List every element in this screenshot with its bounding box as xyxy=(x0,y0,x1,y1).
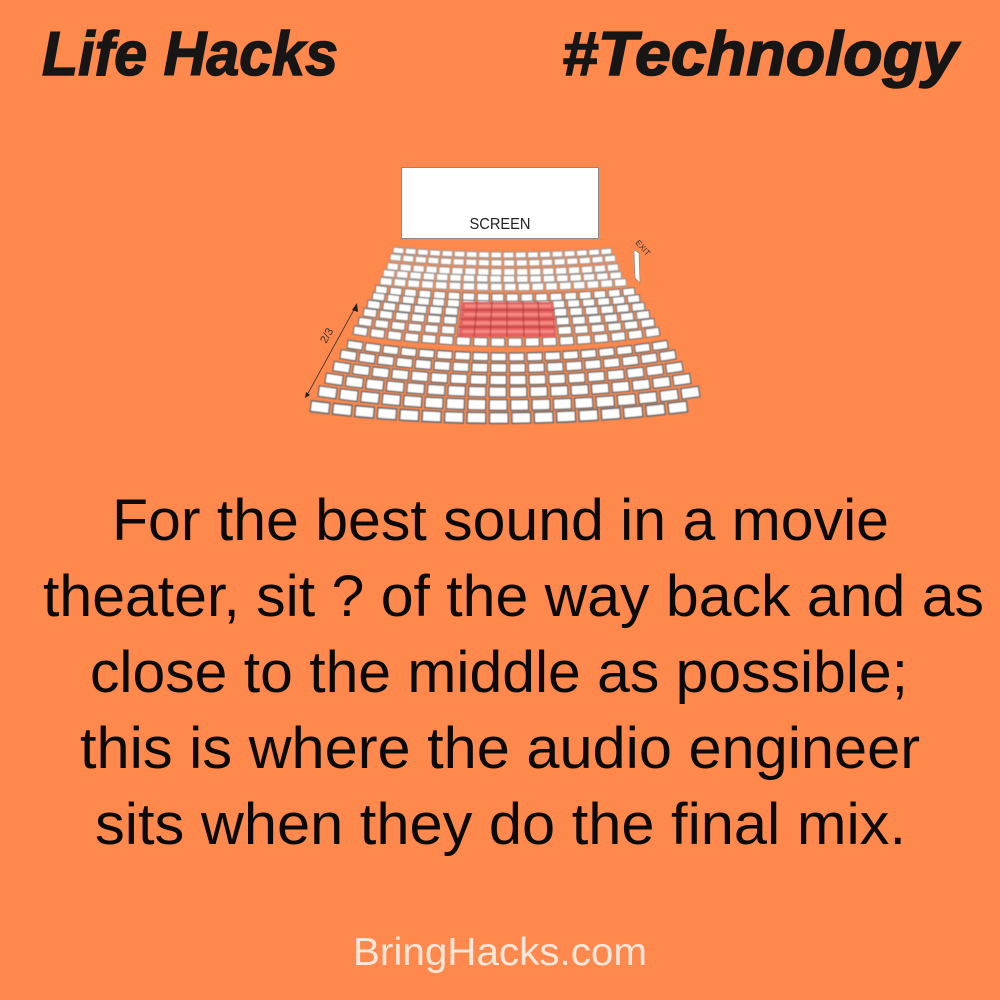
middle seating block xyxy=(353,289,662,342)
heading: Life Hacks: Life Hacks xyxy=(42,20,338,89)
highlighted best-sound seats xyxy=(458,302,556,337)
tip line 5: sits when they do the final mix. xyxy=(95,792,906,857)
two-thirds distance arrow: 2/3 xyxy=(318,326,336,346)
screen xyxy=(402,168,598,238)
exit door xyxy=(634,238,652,283)
tip line 1: For the best sound in a movie xyxy=(112,488,889,553)
heading: #Technology: #Technology xyxy=(562,20,962,89)
theater seating diagram xyxy=(305,168,702,418)
back seating block xyxy=(380,250,628,287)
two-thirds distance arrow xyxy=(305,303,358,398)
footer: BringHacks.com: BringHacks.com xyxy=(353,931,647,974)
tip line 2: theater, sit ? of the way back and as xyxy=(43,564,984,629)
main tip text xyxy=(43,488,984,857)
tip line 4: this is where the audio engineer xyxy=(80,716,920,781)
tip line 3: close to the middle as possible; xyxy=(90,640,908,705)
screen: SCREEN xyxy=(470,216,530,233)
front seating block xyxy=(310,344,702,418)
exit door: EXIT xyxy=(634,238,652,258)
